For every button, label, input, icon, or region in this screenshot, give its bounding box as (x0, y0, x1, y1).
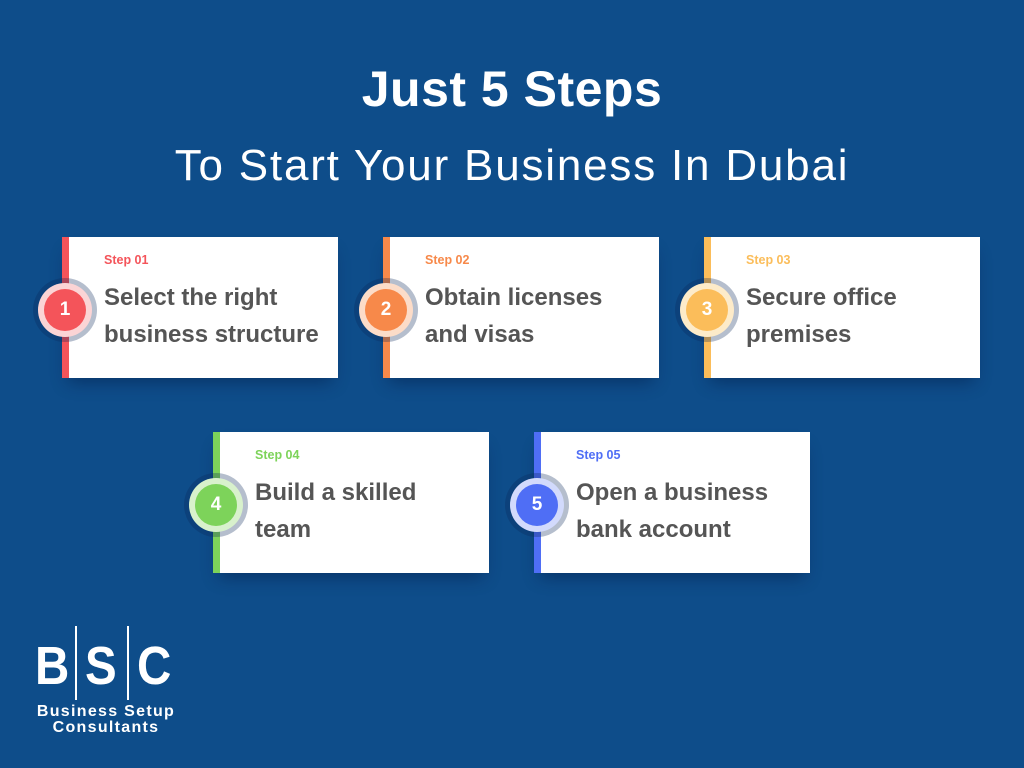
card: step 2: Step 02 (425, 253, 469, 267)
icon: number 5: 5 (532, 494, 542, 515)
card: step 4 (213, 432, 489, 573)
card: step 5 (534, 432, 810, 573)
card: step 3: premises (746, 321, 851, 348)
card: step 5: Step 05 (576, 448, 620, 462)
card: step 3: Secure office (746, 284, 897, 311)
icon: number 3 (675, 278, 739, 342)
icon: number 2: 2 (381, 299, 391, 320)
icon: number 1: 1 (60, 299, 70, 320)
card: step 5: bank account (576, 516, 731, 543)
card: step 4: Build a skilled (255, 479, 416, 506)
logo (35, 626, 175, 736)
card: step 2 (383, 237, 659, 378)
icon: number 1 (33, 278, 97, 342)
icon: number 3: 3 (702, 299, 712, 320)
card: step 1: business structure (104, 321, 319, 348)
icon: number 5 (505, 473, 569, 537)
card: step 3 (704, 237, 980, 378)
card: step 1: Step 01 (104, 253, 148, 267)
title: Just 5 Steps (362, 61, 662, 117)
card: step 4: Step 04 (255, 448, 299, 462)
logo: Consultants (53, 719, 159, 736)
card: step 2: Obtain licenses (425, 284, 602, 311)
logo: B (35, 636, 69, 696)
logo: Business Setup (37, 703, 175, 720)
icon: number 2 (354, 278, 418, 342)
card: step 2: and visas (425, 321, 534, 348)
card: step 4: team (255, 516, 311, 543)
card: step 5: Open a business (576, 479, 768, 506)
logo: S (85, 636, 117, 696)
card: step 3: Step 03 (746, 253, 790, 267)
subtitle: To Start Your Business In Dubai (175, 141, 849, 190)
card: step 1 (62, 237, 338, 378)
icon: number 4: 4 (211, 494, 221, 515)
icon: number 4 (184, 473, 248, 537)
logo: C (137, 636, 171, 696)
card: step 1: Select the right (104, 284, 277, 311)
